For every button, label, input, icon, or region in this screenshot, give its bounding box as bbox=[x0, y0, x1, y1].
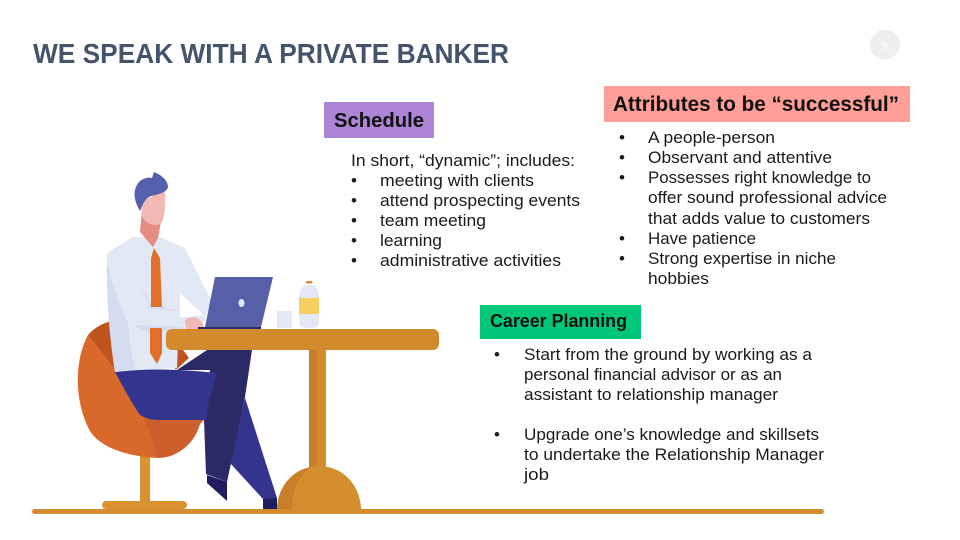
floor line bbox=[32, 509, 824, 514]
tie bbox=[150, 248, 162, 364]
chair bbox=[78, 321, 204, 509]
text: schedule intro and list: meeting with clients bbox=[380, 171, 534, 190]
text: schedule intro and list: attend prospecting events bbox=[380, 191, 580, 210]
neck bbox=[140, 210, 161, 247]
shirt bbox=[107, 237, 211, 372]
text: career planning list bbox=[494, 345, 824, 484]
panel: career planning bbox=[480, 305, 824, 484]
text: career planning list: • bbox=[494, 345, 500, 364]
text: attributes list: that adds value to customers bbox=[648, 209, 870, 228]
text: career planning list: to undertake the Relationship Manager bbox=[524, 445, 824, 464]
heading: attributes: Attributes to be “successful” bbox=[613, 93, 899, 116]
page number badge: 9 bbox=[882, 40, 888, 52]
text: attributes list: • bbox=[619, 168, 625, 187]
text: schedule intro and list: In short, “dynamic”; includes: bbox=[351, 151, 575, 170]
illustration: banker at desk bbox=[32, 172, 824, 514]
text: attributes list: Strong expertise in niche bbox=[648, 249, 836, 268]
text: career planning list: personal financial advisor or as an bbox=[524, 365, 782, 384]
text: schedule intro and list: • bbox=[351, 251, 357, 270]
text: career planning list: assistant to relationship manager bbox=[524, 385, 778, 404]
hand bbox=[185, 317, 204, 329]
laptop bbox=[198, 277, 273, 329]
title: WE SPEAK WITH A PRIVATE BANKER bbox=[33, 38, 509, 69]
text: schedule intro and list: administrative activities bbox=[380, 251, 561, 270]
text: schedule intro and list: • bbox=[351, 211, 357, 230]
panel: schedule bbox=[324, 102, 580, 270]
text: schedule intro and list: • bbox=[351, 231, 357, 250]
text: attributes list: • bbox=[619, 128, 625, 147]
table leg and base bbox=[277, 349, 361, 509]
page number badge bbox=[870, 30, 900, 60]
hair bbox=[135, 172, 168, 211]
heading: schedule bbox=[324, 102, 434, 138]
text: schedule intro and list: learning bbox=[380, 231, 442, 250]
text: attributes list: hobbies bbox=[648, 269, 709, 288]
bottle bbox=[299, 281, 319, 328]
glass bbox=[277, 311, 292, 328]
text: attributes list: A people-person bbox=[648, 128, 775, 147]
text: career planning list: Start from the ground by working as a bbox=[524, 345, 813, 364]
text: schedule intro and list bbox=[351, 151, 580, 270]
text: career planning list: • bbox=[494, 425, 500, 444]
panel: attributes bbox=[604, 86, 910, 288]
trousers and shoes bbox=[115, 350, 277, 509]
heading: schedule: Schedule bbox=[334, 110, 424, 132]
text: attributes list: • bbox=[619, 229, 625, 248]
text: attributes list: Possesses right knowledge to bbox=[648, 168, 871, 187]
heading: career planning: Career Planning bbox=[490, 311, 627, 331]
heading: attributes bbox=[604, 86, 910, 122]
text: attributes list: Observant and attentive bbox=[648, 148, 832, 167]
heading: career planning bbox=[480, 305, 641, 339]
text: attributes list bbox=[619, 128, 887, 288]
text: schedule intro and list: team meeting bbox=[380, 211, 486, 230]
text: schedule intro and list: • bbox=[351, 171, 357, 190]
text: attributes list: Have patience bbox=[648, 229, 756, 248]
text: schedule intro and list: • bbox=[351, 191, 357, 210]
text: career planning list: job bbox=[523, 465, 549, 484]
face bbox=[141, 192, 165, 225]
text: attributes list: offer sound professional advice bbox=[648, 188, 887, 207]
table top bbox=[166, 329, 439, 350]
text: attributes list: • bbox=[619, 249, 625, 268]
text: attributes list: • bbox=[619, 148, 625, 167]
text: career planning list: Upgrade one’s knowledge and skillsets bbox=[524, 425, 819, 444]
